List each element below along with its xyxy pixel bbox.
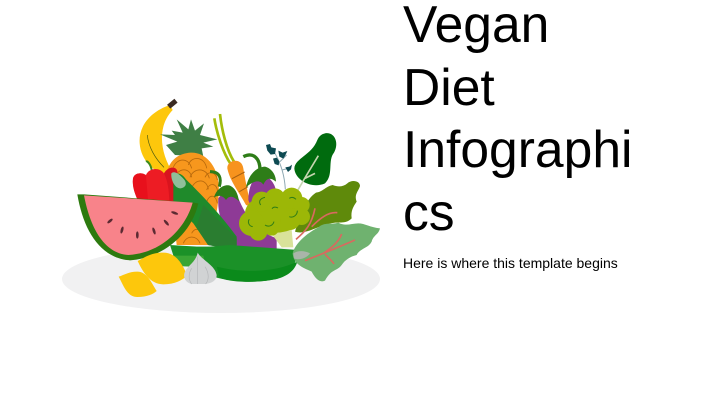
garlic bulb (184, 253, 217, 284)
title: Infographi (403, 120, 632, 178)
plate shadow (62, 245, 380, 313)
broccoli (239, 188, 310, 247)
olive leaf (295, 181, 360, 239)
banana (140, 101, 176, 174)
purple eggplant, front (210, 172, 277, 250)
light green chard leaf (293, 223, 380, 281)
purple eggplant, rear (243, 155, 277, 230)
spinach leaf (294, 133, 336, 191)
cucumber, diagonal (171, 172, 237, 250)
parsley sprig (266, 144, 292, 189)
subtitle: Here is where this template begins (403, 255, 618, 271)
carrot (214, 114, 251, 207)
title: cs (403, 183, 455, 241)
lemons (119, 253, 187, 297)
pineapple (160, 119, 219, 245)
red bell pepper (133, 161, 177, 205)
title: Diet (403, 58, 495, 116)
title (403, 0, 632, 241)
large cucumber, bottom (170, 245, 297, 282)
watermelon slice (77, 194, 198, 260)
